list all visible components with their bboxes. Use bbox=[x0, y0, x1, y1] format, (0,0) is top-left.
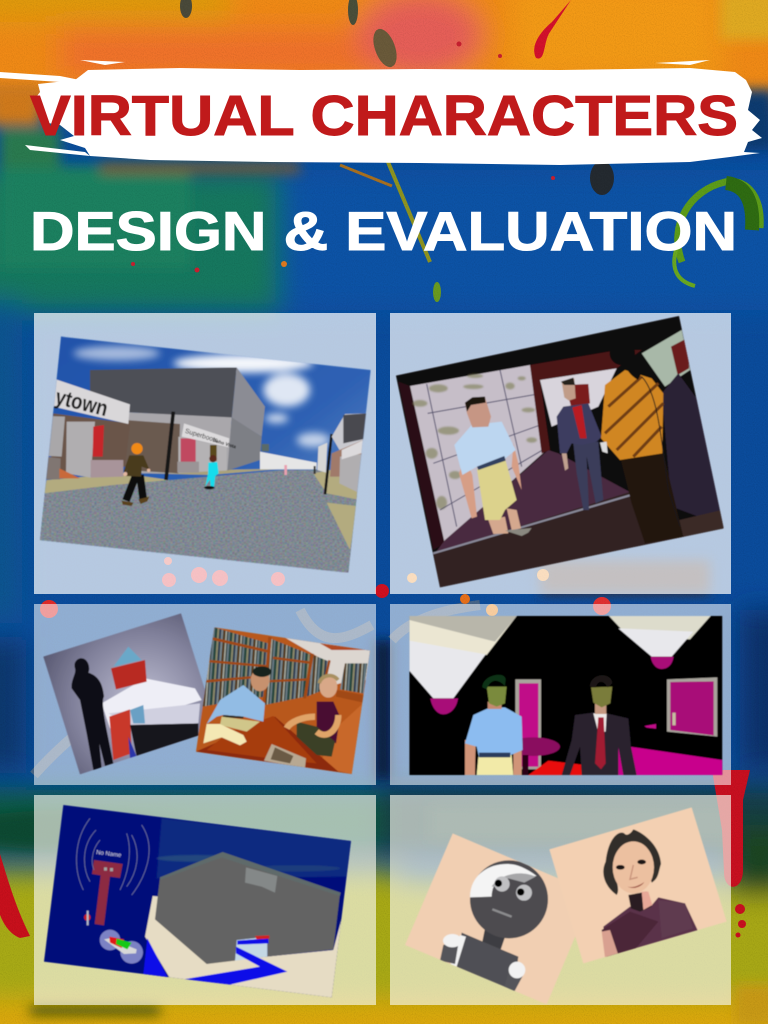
robot figure with name tag bbox=[77, 818, 149, 925]
distant figures bbox=[284, 465, 287, 475]
character: woman at table bbox=[287, 676, 340, 757]
right image: woman avatar bbox=[545, 803, 732, 967]
character: man in blue shirt bbox=[454, 397, 532, 536]
robot figure with name tag: No Name bbox=[96, 850, 122, 859]
road bbox=[30, 470, 363, 577]
panel 6: robot and woman avatar heads bbox=[405, 807, 726, 1004]
left image: grey robot bbox=[405, 833, 576, 1004]
sand ground bbox=[145, 896, 342, 998]
big building bbox=[90, 367, 237, 418]
panel 1: virtual street scene: ytown bbox=[53, 384, 111, 421]
superboots sign bbox=[182, 423, 229, 447]
character: avatar in blue shirt bbox=[465, 675, 523, 775]
blue path bbox=[183, 947, 287, 985]
panel 4: two avatars in magenta and black room bbox=[409, 616, 722, 775]
left shop bbox=[50, 413, 130, 478]
grey building bbox=[155, 853, 340, 964]
wheeled vehicle bbox=[100, 930, 143, 964]
character: avatar in dark suit bbox=[562, 675, 637, 775]
right buildings bbox=[331, 412, 364, 450]
shop banner with sign text bbox=[53, 379, 130, 424]
title banner: brush stroke bbox=[0, 60, 762, 165]
doors bbox=[515, 679, 541, 769]
panel 1: virtual street scene: Boho Vista bbox=[212, 438, 237, 449]
red drops seen through panels bbox=[40, 600, 58, 618]
heading: virtual characters: VIRTUAL CHARACTERS bbox=[30, 84, 738, 148]
swoosh showing through lower panels bbox=[34, 605, 480, 775]
character: cyan figure bbox=[204, 455, 219, 489]
table and floor bbox=[521, 737, 561, 756]
poles bbox=[166, 412, 173, 480]
panel 3: photo of user with projected room bbox=[43, 613, 370, 775]
table bbox=[196, 717, 352, 774]
panel 1: virtual street scene bbox=[40, 336, 372, 573]
character: man at table bbox=[203, 666, 271, 745]
small red marker bbox=[84, 911, 91, 925]
subheading: design and evaluation: DESIGN & EVALUATION bbox=[30, 200, 737, 262]
character: man in dark suit bbox=[557, 378, 603, 510]
silhouette of user bbox=[72, 658, 113, 770]
user in orange shirt bbox=[600, 341, 683, 543]
panel 2: immersive projection room bbox=[395, 315, 724, 588]
panel 5: blue virtual environment with robot avatar bbox=[43, 804, 352, 998]
lamps bbox=[430, 698, 458, 714]
library scene bbox=[193, 623, 373, 780]
light cones bbox=[409, 616, 517, 655]
panel 1: virtual street scene: Superboots bbox=[184, 428, 219, 445]
panels backing bbox=[34, 313, 731, 1005]
character: walking man bbox=[122, 443, 150, 506]
